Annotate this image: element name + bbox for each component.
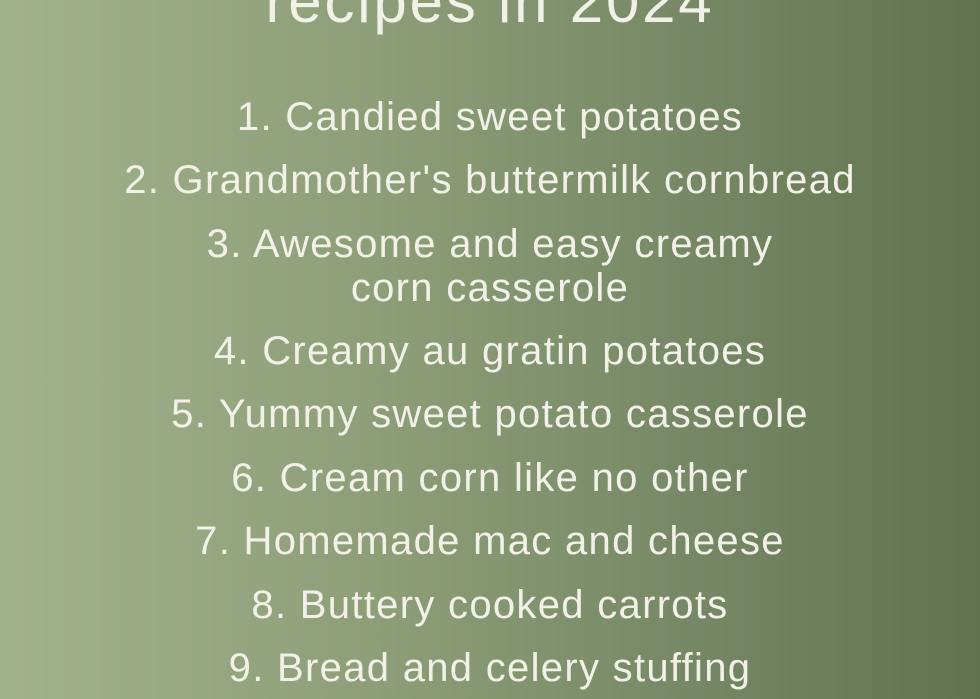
item 3: 3. Awesome and easy creamy xyxy=(207,222,773,266)
item 2: 2. Grandmother's buttermilk cornbread xyxy=(124,158,856,202)
item 3 xyxy=(207,222,773,310)
item 5: 5. Yummy sweet potato casserole xyxy=(171,392,809,436)
item 6: 6. Cream corn like no other xyxy=(231,456,749,500)
item 3: corn casserole xyxy=(351,266,629,310)
item 7: 7. Homemade mac and cheese xyxy=(195,519,785,563)
item 4: 4. Creamy au gratin potatoes xyxy=(214,329,766,373)
item 1: 1. Candied sweet potatoes xyxy=(237,95,743,139)
item 9: 9. Bread and celery stuffing xyxy=(229,646,751,690)
item 8: 8. Buttery cooked carrots xyxy=(251,583,729,627)
